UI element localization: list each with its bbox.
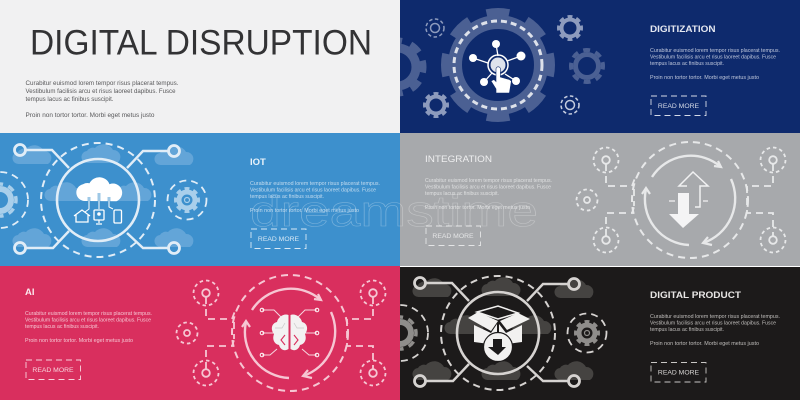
panel: digitization — [371, 0, 800, 133]
body text: Curabitur euismod lorem tempor risus placerat tempus. — [650, 314, 780, 320]
button: READ MORE — [432, 233, 474, 240]
circular frame — [576, 142, 786, 258]
panel: integration — [400, 133, 800, 266]
circuit frame — [0, 143, 206, 257]
button — [426, 226, 480, 246]
body text: Proin non tortor tortor. Morbi eget metus justo — [650, 341, 759, 347]
intro text: Vestibulum facilisis arcu et risus laoreet dapibus. Fusce — [26, 89, 176, 95]
body text — [425, 178, 552, 211]
circular frame — [176, 275, 386, 391]
body text — [650, 48, 780, 81]
button — [251, 229, 306, 248]
body text: tempus lacus ac finibus suscipit. — [650, 327, 724, 333]
button — [651, 362, 706, 382]
icon: brain — [260, 308, 319, 357]
button: READ MORE — [258, 236, 300, 243]
body text: Vestibulum facilisis arcu et risus laoreet dapibus. Fusce — [250, 188, 376, 194]
body text: tempus lacus ac finibus suscipit. — [650, 61, 724, 67]
heading: DIGITAL PRODUCT — [650, 290, 741, 301]
title: DIGITAL DISRUPTION — [30, 24, 372, 62]
intro text: Proin non tortor tortor. Morbi eget metus justo — [26, 113, 155, 119]
body text: Proin non tortor tortor. Morbi eget metus justo — [25, 338, 133, 344]
body text: Proin non tortor tortor. Morbi eget metus justo — [650, 75, 759, 81]
intro text: tempus lacus ac finibus suscipit. — [26, 97, 114, 103]
body text: Vestibulum facilisis arcu et risus laoreet dapibus. Fusce — [650, 54, 776, 60]
button — [26, 360, 80, 380]
heading: DIGITIZATION — [650, 24, 716, 35]
body text: Vestibulum facilisis arcu et risus laoreet dapibus. Fusce — [425, 184, 551, 190]
body text: Curabitur euismod lorem tempor risus placerat tempus. — [250, 181, 380, 187]
panel: digital disruption title — [0, 0, 400, 133]
body text: tempus lacus ac finibus suscipit. — [425, 191, 499, 197]
body text — [250, 181, 380, 214]
body text: Curabitur euismod lorem tempor risus placerat tempus. — [425, 178, 552, 184]
button: READ MORE — [658, 370, 700, 376]
gear cluster — [371, 13, 603, 117]
heading: INTEGRATION — [425, 154, 492, 165]
body text — [25, 311, 152, 344]
body text: Curabitur euismod lorem tempor risus placerat tempus. — [650, 48, 780, 54]
icon: network touch — [469, 40, 526, 93]
icon: open box download — [468, 306, 530, 362]
panel: iot — [0, 133, 400, 266]
icon: up and down arrows — [669, 172, 708, 228]
circuit frame — [372, 276, 606, 390]
panel: digital product — [372, 267, 800, 400]
body text — [650, 314, 780, 347]
body text: Proin non tortor tortor. Morbi eget metus justo — [425, 205, 530, 211]
button: READ MORE — [658, 103, 700, 110]
body text: tempus lacus ac finibus suscipit. — [250, 194, 324, 200]
body text: Curabitur euismod lorem tempor risus placerat tempus. — [25, 311, 152, 317]
panel: ai — [0, 266, 400, 400]
body text: Proin non tortor tortor. Morbi eget metus justo — [250, 208, 359, 214]
intro text — [26, 81, 179, 119]
heading: AI — [25, 287, 34, 298]
watermark: dreamstime — [250, 187, 538, 236]
body text: tempus lacus ac finibus suscipit. — [25, 324, 99, 330]
icon: cloud devices — [74, 177, 122, 224]
body text: Vestibulum facilisis arcu et risus laoreet dapibus. Fusce — [650, 320, 776, 326]
button: READ MORE — [32, 367, 74, 374]
heading: IOT — [250, 157, 266, 168]
intro text: Curabitur euismod lorem tempor risus placerat tempus. — [26, 81, 179, 87]
body text: Vestibulum facilisis arcu et risus laoreet dapibus. Fusce — [25, 318, 151, 324]
button — [651, 96, 706, 116]
